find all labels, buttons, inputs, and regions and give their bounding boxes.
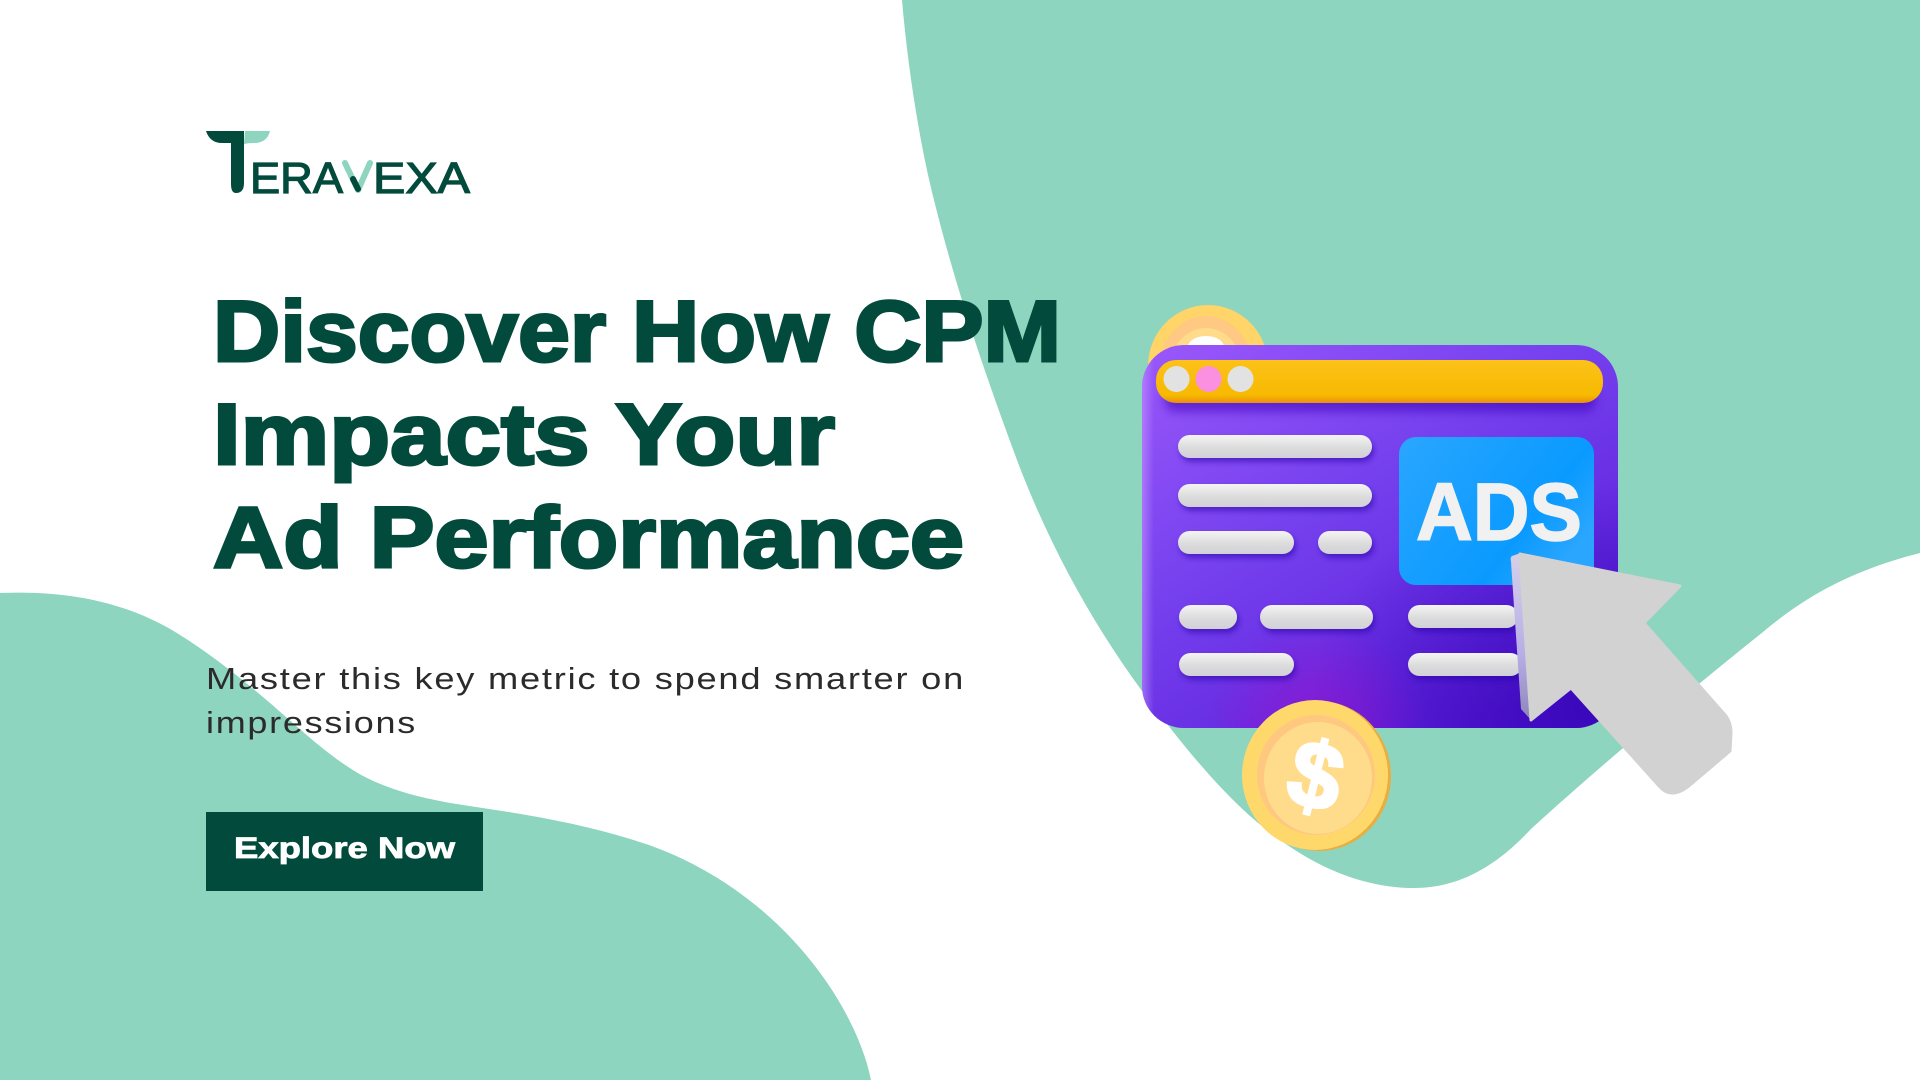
browser top bar xyxy=(1156,360,1603,403)
button: Explore Now: Explore Now xyxy=(234,832,456,865)
ADS tile: ADS xyxy=(1416,467,1582,558)
logo text: ERA: ERA xyxy=(250,154,344,203)
title: Discover How CPM xyxy=(213,284,1061,380)
icon: back coin xyxy=(1148,305,1268,427)
title: Impacts Your xyxy=(213,387,835,483)
title xyxy=(213,284,1061,586)
logo: Teravexa xyxy=(206,131,471,203)
logo mark: leaf xyxy=(244,131,270,144)
subtitle: impressions xyxy=(206,705,417,740)
logo chevron: V xyxy=(345,163,370,190)
panel: browser window xyxy=(1142,345,1618,728)
title: Ad Performance xyxy=(213,490,964,586)
ADS tile xyxy=(1399,437,1594,585)
icon: cursor arrow xyxy=(1511,553,1731,793)
background blob: bottom left mint xyxy=(0,593,871,1080)
subtitle: Master this key metric to spend smarter on xyxy=(206,661,965,696)
logo text: EXA: EXA xyxy=(373,154,471,203)
bar shadow xyxy=(1164,388,1596,412)
button: Explore Now xyxy=(206,812,483,891)
logo mark: T stem xyxy=(206,131,244,193)
browser dots xyxy=(1164,366,1254,392)
text placeholder lines xyxy=(1178,435,1522,676)
icon: front coin: $ xyxy=(1278,718,1354,833)
background blob: top right mint xyxy=(902,0,1920,888)
subtitle xyxy=(206,661,965,740)
illustration: ad window with coins and cursor xyxy=(1142,305,1731,851)
icon: front coin xyxy=(1242,700,1391,851)
